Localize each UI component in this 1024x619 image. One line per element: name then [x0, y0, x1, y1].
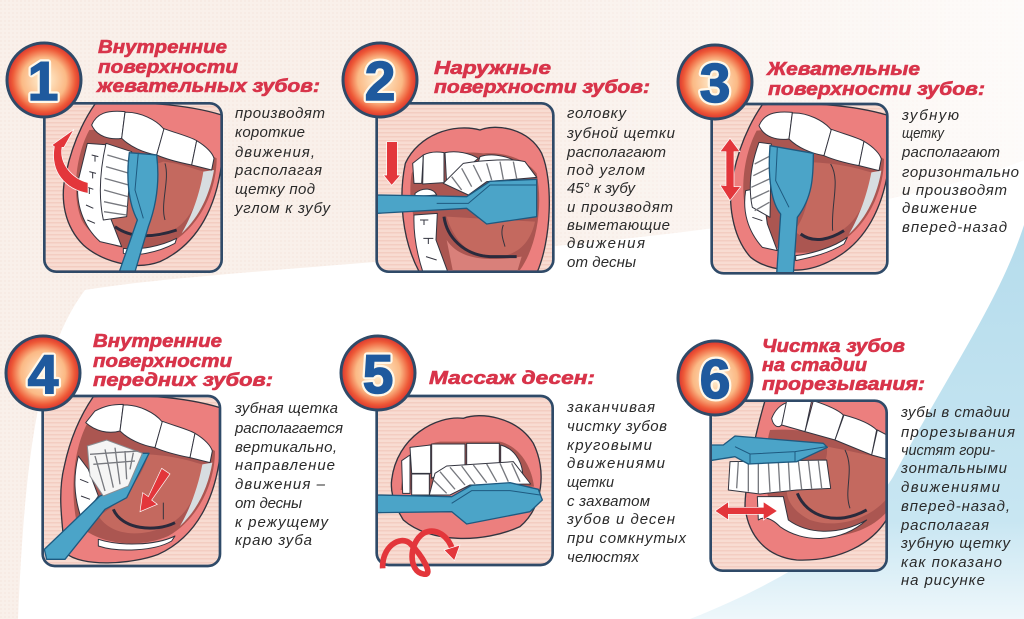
description 3: [901, 107, 1019, 236]
number badge 5: [341, 336, 415, 410]
description 6: располагая: [900, 517, 989, 534]
step 3: [678, 45, 1019, 274]
description 3: вперед-назад: [902, 219, 1007, 236]
description 1: углом к зубу: [234, 200, 332, 217]
heading 4: передних зубов:: [93, 370, 273, 390]
description 5: с захватом: [567, 493, 650, 510]
step 5: [341, 336, 686, 574]
heading 6: прорезывания:: [762, 374, 925, 394]
number badge 1: [7, 43, 81, 117]
description 3: щетку: [902, 125, 945, 142]
heading 2: Наружные: [434, 58, 551, 78]
heading 1: [96, 37, 320, 96]
illustration: step 5 gum massage: [377, 396, 553, 574]
number badge 6: 6: [700, 348, 730, 410]
description 3: и производят: [902, 182, 1007, 199]
description 4: от десны: [235, 495, 302, 512]
number badge 2: [343, 43, 417, 117]
heading 6: Чистка зубов: [762, 336, 905, 356]
description 2: под углом: [567, 162, 645, 179]
description 1: располагая: [234, 162, 322, 179]
description 1: производят: [235, 105, 325, 122]
description 4: направление: [235, 457, 335, 474]
description 5: движениями: [567, 455, 666, 472]
heading 6: на стадии: [762, 355, 867, 375]
number badge 1: 1: [28, 50, 58, 112]
description 5: при сомкнутых: [567, 530, 686, 547]
step 1: [7, 37, 332, 272]
number badge 3: 3: [700, 52, 730, 114]
step 2: [343, 43, 676, 273]
description 1: щетку под: [235, 181, 315, 198]
number badge 4: [6, 336, 80, 410]
number badge 3: 3: [700, 52, 730, 114]
description 1: короткие: [235, 124, 305, 141]
description 4: движения –: [235, 476, 326, 493]
step 6: [678, 336, 1015, 589]
background blue swoosh: [690, 225, 1024, 619]
illustration: step 4 brushing inner front surfaces: [43, 395, 220, 566]
number badge 4: 4: [28, 343, 59, 405]
description 6: чистят гори-: [901, 442, 995, 459]
description 3: горизонтально: [902, 164, 1019, 181]
heading 4: [93, 331, 273, 390]
description 2: движения: [567, 235, 645, 252]
illustration: step 1 brushing inner chewing surfaces: [44, 103, 222, 272]
description 1: движения,: [235, 144, 315, 161]
arrow: up-down: [720, 138, 741, 201]
heading 3: Жевательные: [766, 59, 920, 79]
description 4: краю зуба: [235, 532, 312, 549]
description 5: круговыми: [567, 437, 653, 454]
description 2: 45° к зубу: [567, 180, 636, 197]
description 2: выметающие: [567, 217, 670, 234]
description 2: зубной щетки: [566, 125, 676, 142]
description 1: [234, 105, 332, 217]
arrow: down: [383, 142, 401, 185]
heading 2: поверхности зубов:: [434, 77, 650, 97]
heading 1: Внутренние: [98, 37, 227, 57]
description 6: прорезывания: [901, 424, 1015, 441]
arrow: left-right: [715, 502, 777, 520]
number badge 1: 1: [28, 50, 58, 112]
description 4: [234, 400, 343, 549]
heading 1: поверхности: [98, 57, 238, 77]
description 5: заканчивая: [566, 399, 655, 416]
step 4: [6, 331, 343, 566]
description 5: чистку зубов: [567, 418, 667, 435]
description 4: зубная щетка: [234, 400, 338, 417]
arrow: circular: [383, 531, 460, 574]
heading 1: жевательных зубов:: [96, 76, 320, 96]
description 2: от десны: [567, 254, 636, 271]
description 2: головку: [567, 105, 628, 122]
heading 4: Внутренние: [93, 331, 222, 351]
description 4: располагается: [234, 420, 343, 437]
number badge 6: [678, 341, 752, 415]
heading 3: поверхности зубов:: [768, 79, 985, 99]
number badge 5: 5: [363, 343, 393, 405]
description 3: располагают: [901, 144, 1000, 161]
heading 5: Массаж десен:: [429, 368, 595, 388]
description 2: [566, 105, 676, 271]
description 6: [900, 404, 1015, 589]
number badge 6: 6: [700, 348, 730, 410]
number badge 4: 4: [28, 343, 59, 405]
number badge 2: 2: [365, 50, 395, 112]
description 6: вперед-назад,: [901, 498, 1010, 515]
number badge 3: [678, 45, 752, 119]
description 6: зубную щетку: [900, 535, 1012, 552]
heading 4: поверхности: [93, 351, 232, 371]
description 5: зубов и десен: [566, 511, 675, 528]
heading 2: [434, 58, 650, 97]
description 3: движение: [902, 200, 977, 217]
illustration: step 6 brushing erupting teeth: [710, 401, 890, 571]
heading 6: [762, 336, 925, 394]
description 6: зубы в стадии: [900, 404, 1011, 421]
description 5: челюстях: [567, 549, 640, 566]
description 5: щетки: [567, 474, 615, 491]
description 5: [566, 399, 686, 566]
description 6: как показано: [901, 554, 1002, 571]
illustration: step 3 brushing chewing surfaces: [712, 103, 889, 274]
description 6: зонтальными: [900, 460, 1008, 477]
description 4: вертикально,: [235, 439, 337, 456]
number badge 5: 5: [363, 343, 393, 405]
description 4: к режущему: [235, 514, 330, 531]
arrow: diagonal down: [140, 468, 170, 512]
heading 3: [766, 59, 985, 99]
number badge 2: 2: [365, 50, 395, 112]
arrow: curved red: [52, 129, 88, 193]
description 6: движениями: [901, 479, 1001, 496]
description 3: зубную: [901, 107, 959, 124]
description 6: на рисунке: [901, 572, 985, 589]
description 2: располагают: [566, 144, 666, 161]
illustration: step 2 brushing outer surfaces: [377, 103, 553, 273]
description 2: и производят: [567, 199, 673, 216]
